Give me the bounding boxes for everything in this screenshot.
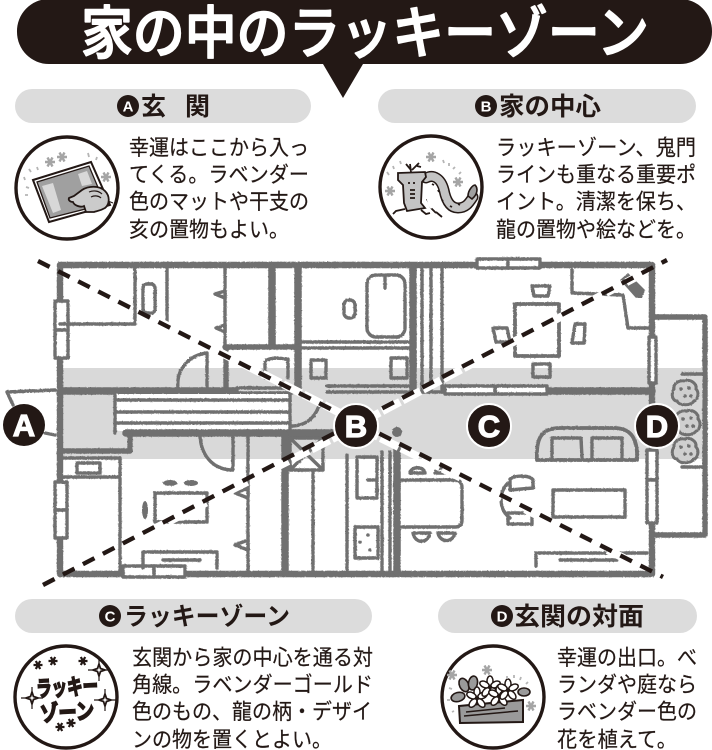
lower right living room	[402, 480, 462, 527]
upper right dining set	[515, 304, 559, 356]
body text A: 亥の置物もよい。	[129, 218, 289, 242]
marker D	[635, 404, 679, 448]
plan walls and furniture	[7, 259, 705, 577]
icon: lucky zone lettering	[15, 646, 117, 748]
marker B: B	[345, 409, 367, 444]
body text C	[132, 646, 373, 750]
body text A: 色のマットや干支の	[129, 190, 309, 214]
body text B: ラインも重なる重要ポ	[496, 163, 696, 187]
marker C: C	[478, 409, 500, 444]
marker B	[334, 404, 378, 448]
diagonal dashed line top left to bottom right	[38, 261, 663, 577]
entrance door	[7, 390, 55, 435]
marker A	[3, 404, 45, 446]
floor plan	[3, 259, 705, 585]
heading badge A	[117, 95, 139, 117]
upper left rooms	[60, 268, 225, 345]
windows	[55, 259, 657, 577]
panel: D opposite the entrance	[438, 599, 697, 750]
heading text A: 関	[185, 93, 210, 121]
body text D: ラベンダー色の	[557, 700, 697, 724]
body text D: ランダや庭なら	[557, 673, 697, 697]
body text A	[129, 136, 309, 242]
balcony	[652, 317, 705, 535]
kitchen	[357, 457, 377, 498]
heading badge D	[491, 605, 513, 627]
heading badge A: A	[123, 98, 134, 116]
heading badge B	[475, 95, 497, 117]
lucky zone band	[62, 368, 702, 459]
banner speech bubble	[17, 0, 712, 98]
outer walls	[60, 265, 652, 574]
heading badge C: C	[105, 608, 116, 626]
heading text C: ラッキーゾーン	[124, 603, 290, 631]
heading badge C	[99, 605, 121, 627]
heading badge D: D	[497, 608, 508, 626]
marker A: A	[13, 408, 35, 443]
body text C: 角線。ラベンダーゴールド	[132, 673, 373, 697]
body text B: 龍の置物や絵などを。	[496, 218, 696, 242]
icon: lavender mat and boar	[16, 137, 118, 239]
panel: B center of house	[378, 89, 696, 242]
icon: flower planter	[442, 646, 544, 748]
title text: 家の中のラッキーゾーン	[81, 2, 649, 66]
body text C: 色のもの、龍の柄・デザイ	[132, 700, 372, 724]
lower left room furniture	[155, 493, 207, 522]
body text C: 玄関から家の中心を通る対	[132, 646, 373, 670]
marker D: D	[646, 409, 668, 444]
body text D: 幸運の出口。べ	[557, 646, 697, 670]
stairs	[115, 394, 290, 433]
balcony planter	[682, 374, 702, 467]
heading pill B	[378, 89, 696, 123]
marker C	[467, 404, 511, 448]
diagonal lines halo	[130, 275, 640, 566]
heading text B: 家の中心	[499, 93, 601, 121]
title banner	[17, 0, 712, 98]
icon: lucky zone lettering: ゾーン	[40, 699, 95, 726]
body text A: 幸運はここから入っ	[129, 136, 309, 160]
panel: C lucky zone	[15, 599, 373, 750]
body text D	[557, 646, 697, 750]
heading text D: 玄関の対面	[514, 603, 644, 631]
body text B: ラッキーゾーン、鬼門	[496, 136, 696, 160]
horizontal partition	[60, 387, 652, 395]
heading text A: 玄	[141, 93, 166, 121]
icon: lucky zone lettering: ラッキー	[36, 673, 99, 702]
diagonal dashed line bottom left to top right	[43, 260, 667, 585]
lower partition	[126, 429, 340, 437]
body text B: イント。清潔を保ち、	[496, 190, 696, 214]
heading pill A	[15, 89, 311, 123]
heading pill D	[438, 599, 697, 633]
body text A: てくる。ラベンダー	[129, 163, 309, 187]
body text B	[496, 136, 696, 242]
heading badge B: B	[481, 98, 492, 116]
panel: A entrance	[15, 89, 311, 242]
icon: dragon	[380, 136, 482, 238]
heading pill C	[15, 599, 372, 633]
